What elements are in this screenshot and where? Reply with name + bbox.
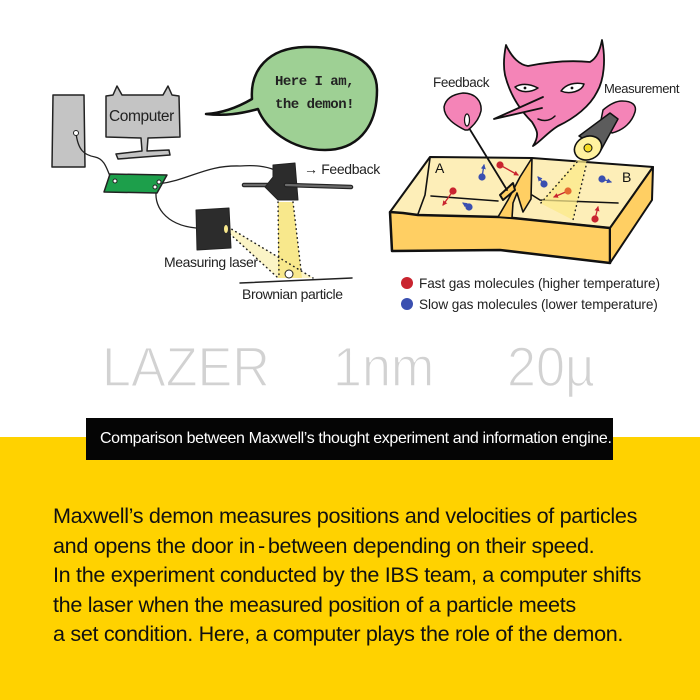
icon: demon head [494,40,604,146]
label: feedback: → Feedback [304,161,381,177]
caption bar: Comparison between Maxwell’s thought experiment and information engine. [100,430,612,447]
faded word: 20µ: 20µ [507,335,595,398]
illustrations [51,39,680,312]
divider wall with door [498,158,532,218]
letter A: A [435,160,445,176]
laser beams [228,202,313,278]
body text: and opens the door in-between depending on their speed. [53,533,594,558]
body text: the laser when the measured position of a particle meets [53,592,576,617]
icon: green circuit board [104,174,167,193]
icon: brownian particle [285,270,293,278]
body text [53,503,641,646]
speech bubble [206,47,377,150]
faded word: 1nm: 1nm [333,335,434,398]
body text: In the experiment conducted by the IBS team, a computer shifts [53,562,641,587]
icon: measuring laser [196,208,231,250]
left diagram: information engine [52,47,381,302]
tower port [74,130,78,136]
yellow background panel [0,437,700,700]
bubble text: Here I am, [275,74,354,90]
caption bar [86,418,613,460]
surface line [240,278,352,283]
icon: computer tower [52,95,85,167]
label: feedback: Feedback [433,75,490,90]
icon: computer monitor [106,86,180,159]
letter B: B [622,169,631,185]
icon: feedback laser and rail [244,163,351,200]
label: measurement: Measurement [604,81,680,96]
label: computer: Computer [109,108,174,125]
bubble text: the demon! [275,97,354,113]
label: brownian particle: Brownian particle [242,286,343,302]
body text: a set condition. Here, a computer plays the role of the demon. [53,621,623,646]
wires [76,133,275,228]
icon: flashlight and hand [570,101,635,164]
box [390,157,653,263]
body text: Maxwell’s demon measures positions and velocities of particles [53,503,637,528]
right diagram: Maxwell's demon [390,40,680,312]
icon: left hand holding rod [444,93,507,190]
label: measuring laser: Measuring laser [164,254,258,270]
faded word: LAZER: LAZER [102,335,270,398]
legend: slow molecules: Slow gas molecules (lower temperature) [419,297,658,312]
measurement light beam [540,160,587,220]
gas molecules [443,161,611,223]
legend: fast molecules: Fast gas molecules (higher temperature) [419,276,660,291]
